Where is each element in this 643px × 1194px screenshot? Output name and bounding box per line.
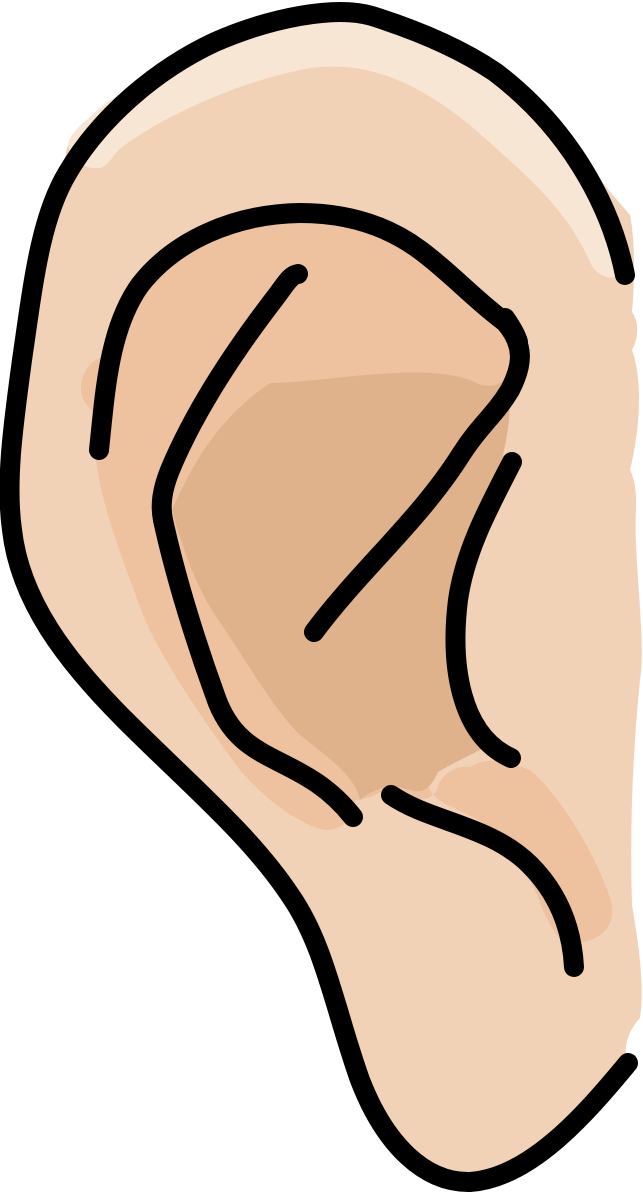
- fold tip: [505, 318, 518, 342]
- inner ear dark tone: [172, 373, 510, 800]
- rim highlight: [68, 11, 625, 277]
- inner ear mid tone: [81, 212, 612, 943]
- helix inner fold line: [99, 213, 520, 632]
- antihelix line: [162, 274, 353, 817]
- concha right line: [456, 462, 512, 758]
- lobe crease line: [391, 795, 574, 967]
